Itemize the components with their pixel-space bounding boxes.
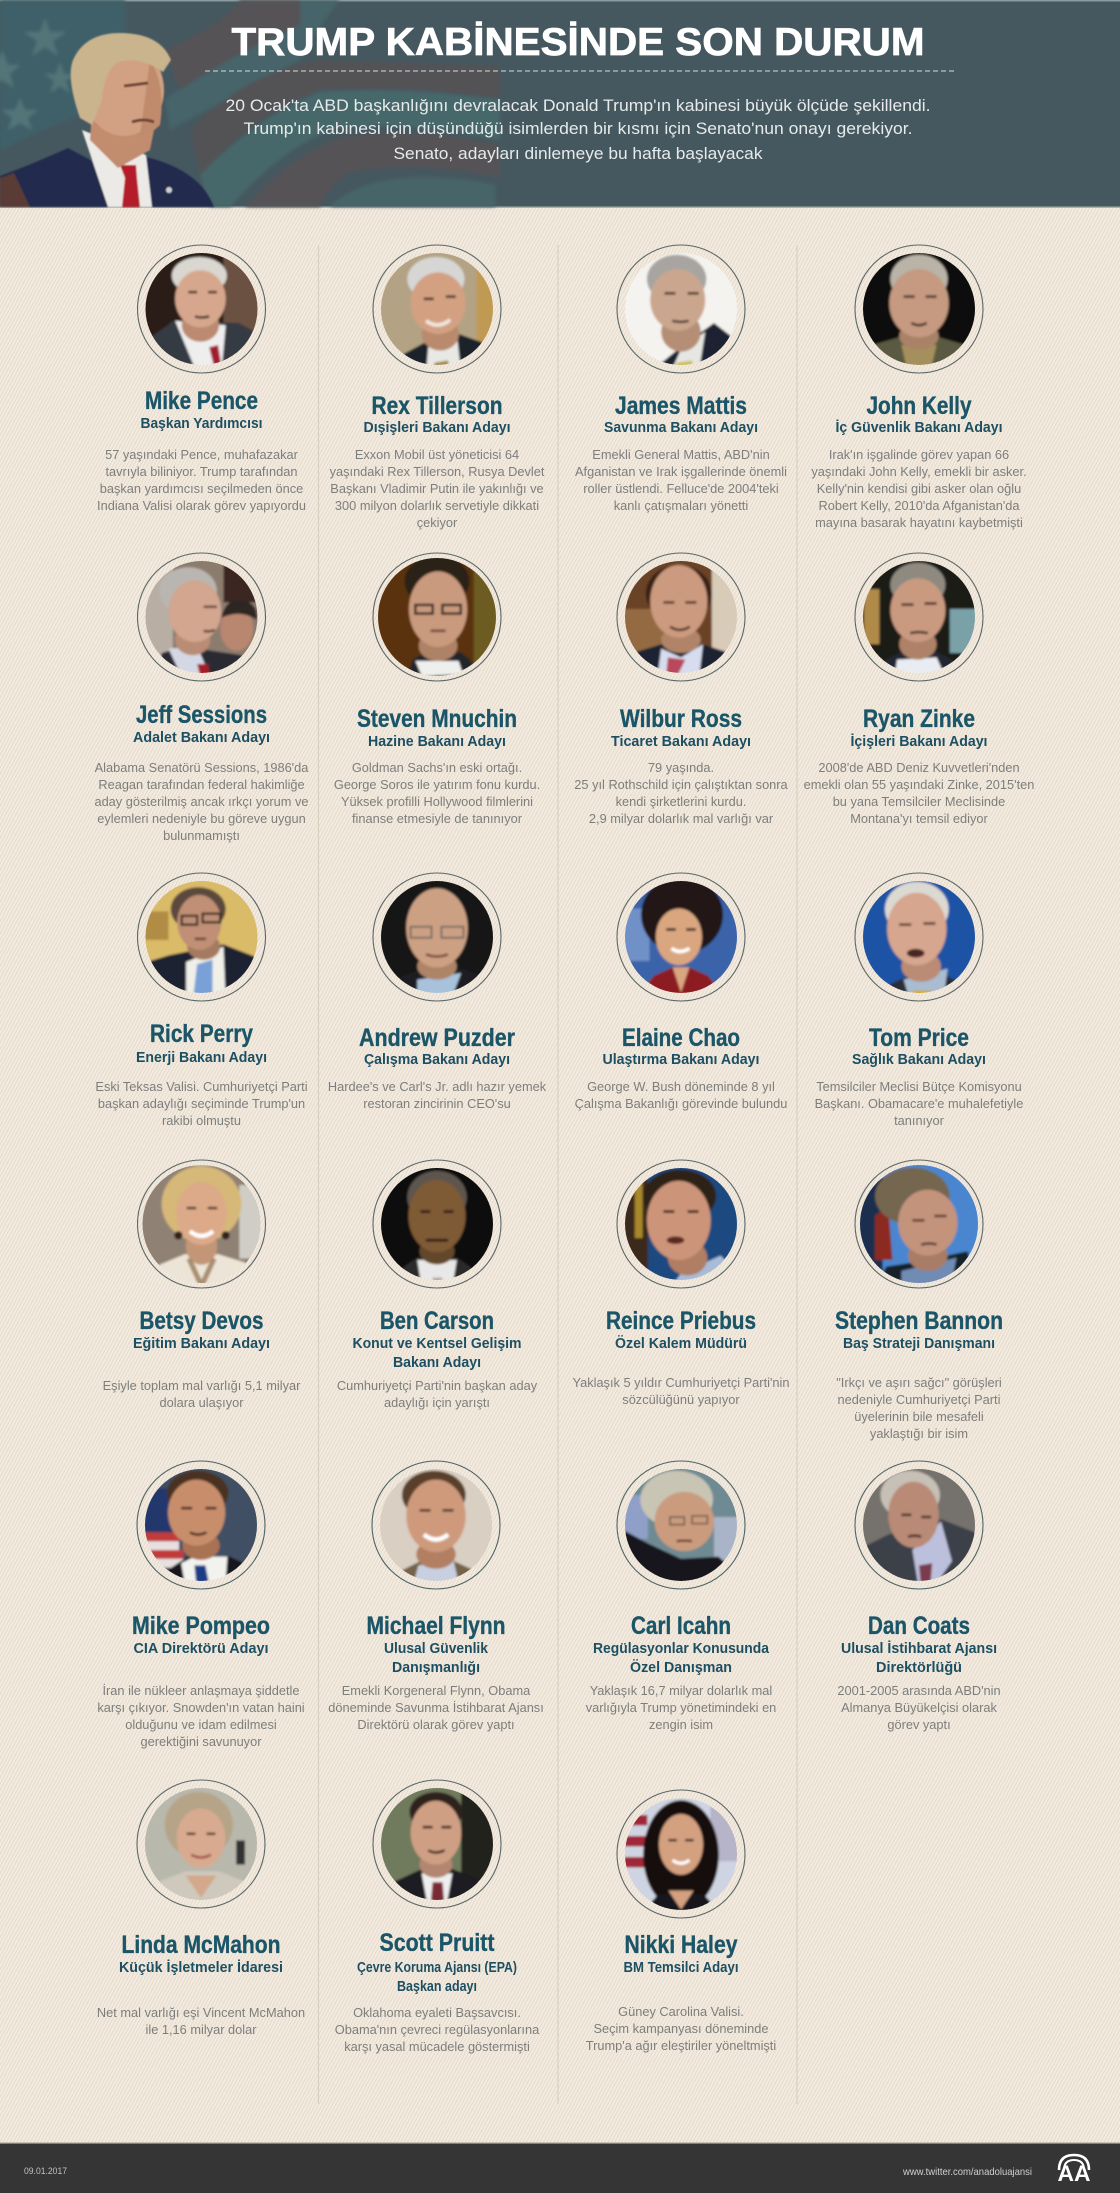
name: Betsy Devos [140, 1307, 264, 1335]
description: Trump'a ağır eleştiriler yöneltmişti [586, 2038, 776, 2053]
name: Rick Perry [150, 1020, 253, 1048]
portrait: James Mattis [617, 245, 745, 374]
description: karşı çıkıyor. Snowden'ın vatan haini [97, 1700, 305, 1715]
description: zengin isim [649, 1717, 713, 1732]
portrait: Andrew Puzder [373, 873, 501, 1002]
role: Ticaret Bakanı Adayı [611, 734, 751, 750]
description: Yaklaşık 5 yıldır Cumhuriyetçi Parti'nin [572, 1375, 790, 1390]
role: Özel Danışman [630, 1659, 732, 1676]
panel: Stephen Bannon [835, 1160, 1003, 1441]
description: Direktörü olarak görev yaptı [357, 1717, 515, 1732]
intro text [226, 96, 930, 163]
role: Çalışma Bakanı Adayı [364, 1052, 510, 1068]
description: Eşiyle toplam mal varlığı 5,1 milyar [103, 1378, 301, 1393]
name: Linda McMahon [122, 1931, 280, 1959]
role: Bakanı Adayı [393, 1355, 481, 1371]
name: Rex Tillerson [372, 392, 502, 420]
name: Stephen Bannon [835, 1307, 1003, 1335]
description: üyelerinin bile mesafeli [854, 1409, 984, 1424]
name: Elaine Chao [622, 1024, 740, 1052]
role: Ulaştırma Bakanı Adayı [602, 1052, 760, 1068]
intro text: 20 Ocak'ta ABD başkanlığını devralacak Donald Trump'ın kabinesi büyük ölçüde şekillendi. [226, 96, 930, 115]
portrait: Jeff Sessions [138, 553, 266, 682]
panel: Ben Carson [337, 1160, 538, 1410]
icon: Anadolu Agency logo: AA [1058, 2161, 1091, 2186]
panel: Mike Pence [97, 245, 306, 513]
role: Hazine Bakanı Adayı [368, 734, 506, 750]
role: BM Temsilci Adayı [624, 1960, 738, 1976]
description: 2008'de ABD Deniz Kuvvetleri'nden [818, 760, 1020, 775]
flag backdrop [0, 0, 500, 207]
panel: Ryan Zinke [804, 553, 1034, 826]
description: Seçim kampanyası döneminde [594, 2021, 768, 2036]
description: Çalışma Bakanlığı görevinde bulundu [575, 1096, 787, 1111]
panel: Betsy Devos [103, 1160, 301, 1410]
role: Dışişleri Bakanı Adayı [364, 420, 510, 436]
portrait: Donald Trump [0, 33, 214, 207]
description: mayına basarak hayatını kaybetmişti [815, 515, 1023, 530]
description: Robert Kelly, 2010'da Afganistan'da [818, 498, 1020, 513]
description: Alabama Senatörü Sessions, 1986'da [95, 760, 309, 775]
name: John Kelly [866, 392, 972, 420]
description: Başkanı. Obamacare'e muhalefetiyle [815, 1096, 1023, 1111]
role: İç Güvenlik Bakanı Adayı [836, 419, 1002, 436]
name: Nikki Haley [624, 1931, 738, 1959]
description: Oklahoma eyaleti Başsavcısı. [353, 2005, 521, 2020]
portrait: Steven Mnuchin [373, 553, 502, 684]
description: tanınıyor [894, 1113, 945, 1128]
role: İçişleri Bakanı Adayı [850, 733, 988, 750]
panel: Wilbur Ross [574, 553, 789, 826]
footer [0, 2142, 1120, 2193]
portrait: Stephen Bannon [854, 1160, 984, 1292]
portrait: Linda McMahon [137, 1780, 265, 1909]
description: sözcülüğünü yapıyor [622, 1392, 740, 1407]
portrait: Rex Tillerson [373, 245, 501, 374]
description: "Irkçı ve aşırı sağcı" görüşleri [836, 1375, 1002, 1390]
intro text: Trump'ın kabinesi için düşündüğü isimlerden bir kısmı için Senato'nun onayı gerekiyor. [244, 119, 912, 138]
name: James Mattis [615, 392, 747, 420]
description: Eski Teksas Valisi. Cumhuriyetçi Parti [95, 1079, 308, 1094]
name: Ryan Zinke [863, 705, 975, 733]
panel: Dan Coats [837, 1461, 1001, 1732]
description: Montana'yı temsil ediyor [850, 811, 989, 826]
portrait: John Kelly [855, 245, 983, 374]
description: Net mal varlığı eşi Vincent McMahon [97, 2005, 305, 2020]
panel: Carl Icahn [586, 1461, 776, 1732]
description: olduğunu ve idam edilmesi [125, 1717, 277, 1732]
description: adaylığı için yarıştı [384, 1395, 490, 1410]
description: karşı yasal mücadele göstermişti [344, 2039, 530, 2054]
description: roller üstlendi. Felluce'de 2004'teki [583, 481, 779, 496]
panel: Rex Tillerson [330, 245, 545, 530]
description: Almanya Büyükelçisi olarak [841, 1700, 997, 1715]
panel: Michael Flynn [328, 1461, 544, 1732]
description: 79 yaşında. [648, 760, 714, 775]
role: Savunma Bakanı Adayı [604, 420, 758, 436]
panel: James Mattis [575, 245, 787, 513]
description: tavrıyla biliniyor. Trump tarafından [105, 464, 298, 479]
name: Mike Pompeo [132, 1612, 270, 1640]
description: Hardee's ve Carl's Jr. adlı hazır yemek [328, 1079, 547, 1094]
name: Ben Carson [380, 1307, 494, 1335]
description: Afganistan ve Irak işgallerinde önemli [575, 464, 787, 479]
role: Regülasyonlar Konusunda [593, 1641, 770, 1657]
description: 57 yaşındaki Pence, muhafazakar [105, 447, 299, 462]
description: Indiana Valisi olarak görev yapıyordu [97, 498, 306, 513]
header banner [0, 0, 1120, 208]
description: Güney Carolina Valisi. [618, 2004, 744, 2019]
source url: www.twitter.com/anadoluajansi [902, 2166, 1032, 2178]
role: Danışmanlığı [392, 1660, 480, 1676]
description: 25 yıl Rothschild için çalıştıktan sonra [574, 777, 789, 792]
description: İran ile nükleer anlaşmaya şiddetle [102, 1683, 300, 1698]
description: Yüksek profilli Hollywood filmlerini [341, 794, 533, 809]
description: bu yana Temsilciler Meclisinde [833, 794, 1005, 809]
role: Eğitim Bakanı Adayı [133, 1336, 270, 1352]
panel: Linda McMahon [97, 1780, 305, 2037]
role: Direktörlüğü [876, 1660, 962, 1676]
description: Goldman Sachs'ın eski ortağı. [352, 760, 522, 775]
name: Tom Price [869, 1024, 969, 1052]
portrait: Mike Pompeo [137, 1461, 265, 1590]
description: George Soros ile yatırım fonu kurdu. [334, 777, 540, 792]
role: Başkan Yardımcısı [140, 416, 262, 432]
description: Emekli Korgeneral Flynn, Obama [342, 1683, 531, 1698]
portrait: Reince Priebus [617, 1160, 745, 1289]
description: döneminde Savunma İstihbarat Ajansı [328, 1700, 544, 1715]
description: gerektiğini savunuyor [141, 1734, 262, 1749]
description: başkan adaylığı seçiminde Trump'un [98, 1096, 305, 1111]
description: emekli olan 55 yaşındaki Zinke, 2015'ten [804, 777, 1034, 792]
role: Konut ve Kentsel Gelişim [352, 1336, 522, 1352]
description: ile 1,16 milyar dolar [146, 2022, 257, 2037]
description: kendi şirketlerini kurdu. [616, 794, 746, 809]
description: finanse etmesiyle de tanınıyor [352, 811, 523, 826]
panel: Scott Pruitt [335, 1780, 540, 2054]
portrait: Nikki Haley [617, 1790, 745, 1918]
description: yaklaştığı bir isim [870, 1426, 968, 1441]
name: Steven Mnuchin [357, 705, 517, 733]
description: nedeniyle Cumhuriyetçi Parti [838, 1392, 1000, 1407]
description: varlığıyla Trump yönetimindeki en [586, 1700, 776, 1715]
panel: John Kelly [811, 245, 1027, 530]
role: Özel Kalem Müdürü [615, 1335, 747, 1352]
role: Enerji Bakanı Adayı [136, 1050, 267, 1066]
description: rakibi olmuştu [162, 1113, 241, 1128]
description: bulunmamıştı [163, 828, 240, 843]
description: George W. Bush döneminde 8 yıl [587, 1079, 775, 1094]
name: Michael Flynn [366, 1612, 506, 1640]
description: 300 milyon dolarlık servetiyle dikkati [335, 498, 539, 513]
name: Reince Priebus [606, 1307, 756, 1335]
description: 2001-2005 arasında ABD'nin [837, 1683, 1001, 1698]
name: Mike Pence [145, 387, 258, 415]
portrait: Scott Pruitt [373, 1780, 501, 1909]
description: Cumhuriyetçi Parti'nin başkan aday [337, 1378, 538, 1393]
role: Adalet Bakanı Adayı [133, 730, 270, 746]
description: kanlı çatışmaları yönetti [614, 498, 748, 513]
name: Jeff Sessions [136, 701, 267, 729]
description: aday gösterilmiş ancak ırkçı yorum ve [94, 794, 309, 809]
panel: Elaine Chao [575, 873, 787, 1111]
portrait: Wilbur Ross [617, 553, 745, 682]
portrait: Betsy Devos [138, 1160, 266, 1289]
role: Ulusal İstihbarat Ajansı [841, 1640, 997, 1657]
description: Obama'nın çevreci regülasyonlarına [335, 2022, 540, 2037]
description: restoran zincirinin CEO'su [363, 1096, 511, 1111]
portrait: Elaine Chao [617, 873, 745, 1001]
name: Andrew Puzder [359, 1024, 515, 1052]
name: Wilbur Ross [620, 705, 742, 733]
panel: Nikki Haley [586, 1790, 776, 2053]
panel: Mike Pompeo [97, 1461, 305, 1749]
role: Çevre Koruma Ajansı (EPA) [357, 1960, 517, 1976]
role: CIA Direktörü Adayı [134, 1641, 268, 1657]
description: Emekli General Mattis, ABD'nin [592, 447, 770, 462]
role: Başkan adayı [397, 1979, 477, 1995]
role: Küçük İşletmeler İdaresi [119, 1959, 283, 1976]
portrait: Rick Perry [138, 873, 266, 1002]
description: dolara ulaşıyor [160, 1395, 244, 1410]
description: Irak'ın işgalinde görev yapan 66 [829, 447, 1009, 462]
description: çekiyor [417, 515, 458, 530]
name: Dan Coats [868, 1612, 970, 1640]
role: Baş Strateji Danışmanı [843, 1336, 995, 1352]
panel: Steven Mnuchin [334, 553, 540, 826]
portrait: Michael Flynn [372, 1461, 500, 1590]
panel: Reince Priebus [572, 1160, 790, 1407]
portrait: Ben Carson [373, 1160, 501, 1289]
name: Carl Icahn [631, 1612, 731, 1640]
panel: Andrew Puzder [328, 873, 547, 1111]
description: yaşındaki John Kelly, emekli bir asker. [811, 464, 1027, 479]
portrait: Dan Coats [855, 1461, 983, 1590]
description: Reagan tarafından federal hakimliğe [98, 777, 305, 792]
portrait: Tom Price [855, 873, 983, 1002]
role: Ulusal Güvenlik [384, 1641, 489, 1657]
description: Yaklaşık 16,7 milyar dolarlık mal [590, 1683, 772, 1698]
description: eylemleri nedeniyle bu göreve uygun [97, 811, 306, 826]
intro text: Senato, adayları dinlemeye bu hafta başlayacak [394, 144, 763, 163]
name: Scott Pruitt [380, 1929, 495, 1957]
portrait: Mike Pence [138, 245, 266, 374]
panel: Tom Price [815, 873, 1023, 1128]
role: Sağlık Bakanı Adayı [852, 1052, 986, 1068]
description: Kelly'nin kendisi gibi asker olan oğlu [817, 481, 1021, 496]
panel: Jeff Sessions [94, 553, 309, 843]
panel: Rick Perry [95, 873, 308, 1128]
description: 2,9 milyar dolarlık mal varlığı var [589, 811, 774, 826]
portrait: Ryan Zinke [855, 553, 983, 682]
description: başkan yardımcısı seçilmeden önce [100, 481, 303, 496]
portrait: Carl Icahn [617, 1461, 745, 1590]
description: Başkanı Vladimir Putin ile yakınlığı ve [330, 481, 544, 496]
title: TRUMP KABİNESİNDE SON DURUM [232, 21, 924, 64]
description: yaşındaki Rex Tillerson, Rusya Devlet [330, 464, 545, 479]
date: 09.01.2017 [24, 2166, 67, 2177]
description: Temsilciler Meclisi Bütçe Komisyonu [816, 1079, 1022, 1094]
description: görev yaptı [887, 1717, 951, 1732]
description: Exxon Mobil üst yöneticisi 64 [355, 447, 519, 462]
